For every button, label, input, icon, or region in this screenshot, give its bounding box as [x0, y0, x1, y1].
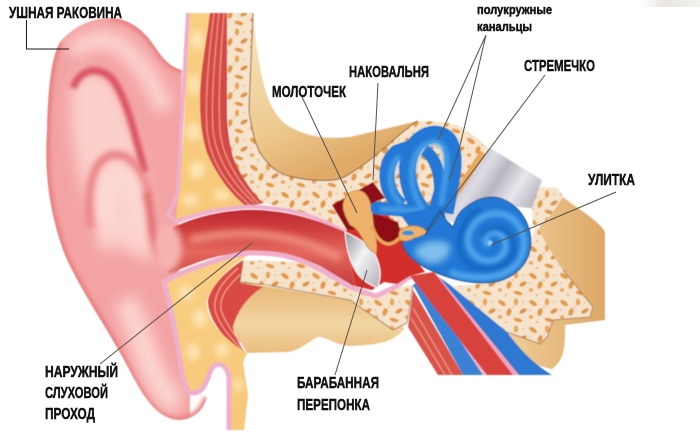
label: cochlea: УЛИТКА	[588, 172, 635, 189]
label: eardrum line 2: ПЕРЕПОНКА	[297, 397, 370, 414]
leader: cochlea	[491, 192, 616, 245]
label: hammer: МОЛОТОЧЕК	[272, 84, 346, 101]
vestibule highlight	[414, 241, 450, 264]
label: semicircular canals line 1: полукружные	[477, 3, 552, 17]
ossicle stapes	[399, 226, 426, 241]
ear canal	[168, 210, 355, 287]
lower tan tissue	[233, 282, 405, 353]
pinna rim highlight	[72, 40, 165, 110]
small right bone	[532, 187, 563, 226]
label: stirrup: СТРЕМЕЧКО	[524, 58, 595, 75]
bone contour line	[249, 13, 417, 181]
outer ear pinna	[40, 10, 207, 425]
upper pink skin line	[168, 13, 345, 232]
right spongy bone	[447, 225, 593, 344]
leader lines	[26, 20, 616, 375]
spongy temporal bone	[227, 13, 490, 240]
label: auditory canal line 2: СЛУХОВОЙ	[45, 383, 108, 402]
antihelix fold	[90, 155, 148, 228]
right tan tissue	[505, 195, 605, 369]
middle ear red cavity	[345, 200, 425, 290]
leader: pinna	[26, 20, 69, 49]
tube red channel	[410, 272, 513, 375]
cochlea center	[487, 240, 493, 246]
tube muscle	[408, 290, 463, 375]
lower fat blotches	[179, 286, 242, 392]
ossicle malleus	[343, 190, 377, 254]
label: auditory canal line 1: НАРУЖНЫЙ	[45, 362, 118, 381]
antihelix highlight	[104, 175, 145, 250]
inner ear labyrinth	[377, 134, 531, 283]
upper fat layer	[176, 13, 247, 220]
tragus blending pink	[154, 224, 182, 272]
label: pinna: УШНАЯ РАКОВИНА	[9, 5, 122, 22]
canal base junction	[400, 206, 446, 232]
lower bone outline	[240, 261, 413, 330]
upper muscle fibres	[206, 13, 259, 205]
leader: auditory canal	[100, 243, 252, 364]
tube muscle fibres	[411, 308, 452, 375]
label: semicircular canals line 2: канальцы	[477, 20, 532, 34]
lobe highlight	[125, 300, 178, 405]
tube second blue channel	[439, 277, 552, 375]
tube blue channel	[413, 280, 483, 375]
label: eardrum line 1: БАРАБАННАЯ	[297, 375, 379, 392]
leader: stirrup	[425, 75, 545, 235]
faint corner smudge	[640, 0, 700, 7]
lateral canal	[377, 208, 425, 212]
vestibule and cochlea body	[402, 197, 531, 283]
upper concavity	[71, 72, 155, 260]
left canal	[387, 146, 415, 206]
lower spongy bone	[240, 260, 413, 330]
orange bone seam	[452, 153, 484, 203]
posterior inner canal	[424, 150, 440, 212]
superior canal	[407, 134, 453, 216]
canal highlights	[380, 142, 447, 211]
ossicle incus	[372, 226, 401, 244]
label: auditory canal line 3: ПРОХОД	[45, 406, 95, 423]
leader: canals	[438, 35, 486, 180]
cochlea spiral shade	[459, 208, 514, 269]
pinna outer edge shade	[46, 18, 207, 420]
label: incus: НАКОВАЛЬНЯ	[349, 64, 429, 81]
membrane band	[443, 148, 542, 225]
eardrum	[345, 232, 380, 288]
eustachian tube and vessels	[408, 272, 552, 375]
concha shadow	[146, 192, 178, 272]
leader: eardrum	[335, 270, 367, 375]
tan tissue upper	[248, 13, 425, 190]
right bone outline	[507, 270, 593, 344]
lower fat layer	[166, 254, 250, 430]
lower muscle fibres	[215, 268, 243, 350]
lower muscle	[208, 260, 263, 355]
leader: incus	[373, 83, 378, 180]
leader: hammer	[302, 97, 357, 213]
tube pink stripe	[420, 278, 487, 375]
helix fold shadow	[73, 71, 145, 172]
stapes opening	[402, 231, 414, 235]
cochlea spiral highlight	[450, 213, 524, 277]
anatomical drawing	[40, 10, 605, 430]
pinna base shape	[40, 10, 190, 425]
dark red middle ear space	[332, 182, 402, 246]
tube second pink stripe	[434, 272, 519, 375]
upper fat blotches	[182, 31, 230, 206]
lower pink skin line	[164, 253, 411, 430]
upper muscle	[200, 13, 263, 207]
canal highlight	[190, 234, 340, 258]
